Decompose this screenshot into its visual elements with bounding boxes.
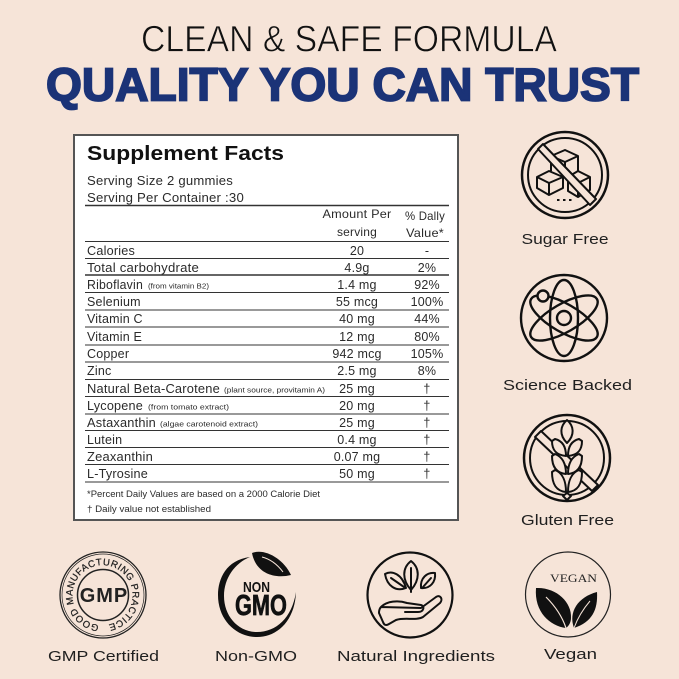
icon: vegan badge <box>526 552 610 637</box>
footnotes: † Daily value not established <box>87 504 211 514</box>
nutrient rows: 50 mg <box>339 467 375 481</box>
nutrient rows: 25 mg <box>339 382 375 396</box>
nutrient rows: Total carbohydrate <box>87 261 199 275</box>
footnotes: *Percent Daily Values are based on a 2000 Calorie Diet <box>87 489 321 499</box>
serving info: Serving Per Container :30 <box>87 191 244 205</box>
nutrient rows: † <box>423 382 431 396</box>
nutrient rows: 0.4 mg <box>337 433 377 447</box>
label: vegan: Vegan <box>544 646 597 663</box>
label: science backed: Science Backed <box>503 377 632 394</box>
nutrient rows: 2% <box>418 261 436 275</box>
nutrient rows: Zeaxanthin <box>87 450 153 464</box>
nutrient rows: Vitamin E <box>87 330 142 344</box>
nutrient rows: Astaxanthin <box>87 416 156 430</box>
icon: GMP badge: GMP <box>80 585 128 607</box>
nutrient rows: † <box>423 416 431 430</box>
icon: natural ingredients hand and leaves <box>368 552 452 638</box>
nutrient rows: Zinc <box>87 364 111 378</box>
serving info: Serving Size 2 gummies <box>87 174 233 188</box>
label: gluten free: Gluten Free <box>521 512 614 529</box>
nutrient rows: 105% <box>411 347 443 361</box>
nutrient rows: Lutein <box>87 433 122 447</box>
nutrient rows: (from tomato extract) <box>148 404 229 412</box>
nutrient rows: † <box>423 467 431 481</box>
nutrient rows: Lycopene <box>87 399 143 413</box>
nutrient rows: 20 mg <box>339 399 375 413</box>
nutrient rows: Selenium <box>87 295 141 309</box>
nutrient rows: † <box>423 450 431 464</box>
label: natural ingredients: Natural Ingredients <box>337 648 495 665</box>
nutrient rows: 100% <box>411 295 443 309</box>
icon: non-GMO badge <box>218 552 296 637</box>
table rules <box>85 206 449 482</box>
nutrient rows: 1.4 mg <box>337 278 377 292</box>
nutrient rows: (algae carotenoid extract) <box>160 422 258 428</box>
column headers: Amount Per <box>322 207 392 221</box>
column headers: % Dally <box>405 209 445 223</box>
nutrient rows: † <box>423 433 431 447</box>
nutrient rows: 2.5 mg <box>337 364 377 378</box>
label: non-GMO: Non-GMO <box>215 648 297 665</box>
table heading: Supplement Facts <box>87 142 284 165</box>
icon: gluten free wheat <box>524 415 610 501</box>
nutrient rows <box>87 244 443 481</box>
nutrient rows: 12 mg <box>339 330 375 344</box>
heading: quality you can trust: QUALITY YOU CAN TRUST <box>46 58 639 110</box>
nutrient rows: Copper <box>87 347 129 361</box>
column headers: Value* <box>406 226 444 240</box>
column headers <box>322 207 445 240</box>
nutrient rows: 20 <box>350 244 364 258</box>
nutrient rows: 4.9g <box>344 261 370 275</box>
nutrient rows: 942 mcg <box>332 347 382 361</box>
nutrient rows: (from vitamin B2) <box>148 284 209 290</box>
nutrient rows: Riboflavin <box>87 278 143 292</box>
column headers: serving <box>337 225 377 239</box>
nutrient rows: 55 mcg <box>336 295 378 309</box>
nutrient rows: Calories <box>87 244 135 258</box>
icon: non-GMO badge: NON <box>243 579 270 596</box>
nutrient rows: Natural Beta-Carotene <box>87 382 220 396</box>
nutrient rows: 0.07 mg <box>334 450 380 464</box>
nutrient rows: 8% <box>418 364 436 378</box>
label: sugar free: Sugar Free <box>522 231 608 248</box>
serving info <box>87 174 244 205</box>
nutrient rows: L-Tyrosine <box>87 467 148 481</box>
nutrient rows: † <box>423 399 431 413</box>
icon: science backed atom <box>521 275 607 361</box>
nutrient rows: 25 mg <box>339 416 375 430</box>
nutrient rows: 92% <box>414 278 440 292</box>
title: clean and safe formula: CLEAN & SAFE FORMULA <box>141 18 557 60</box>
icon: sugar free <box>522 132 608 218</box>
panel: supplement facts table <box>74 135 458 520</box>
nutrient rows: Vitamin C <box>87 312 143 326</box>
nutrient rows: 80% <box>414 330 440 344</box>
label: GMP certified: GMP Certified <box>48 648 159 665</box>
icon: vegan badge: VEGAN <box>550 571 597 585</box>
icon: non-GMO badge: GMO <box>235 590 287 622</box>
footnotes <box>87 489 321 514</box>
icon: GMP badge: GOOD MANUFACTURING PRACTICE <box>66 558 140 631</box>
nutrient rows: - <box>425 244 429 258</box>
nutrient rows: (plant source, provitamin A) <box>224 388 325 394</box>
nutrient rows: 40 mg <box>339 312 375 326</box>
nutrient rows: 44% <box>414 312 440 326</box>
